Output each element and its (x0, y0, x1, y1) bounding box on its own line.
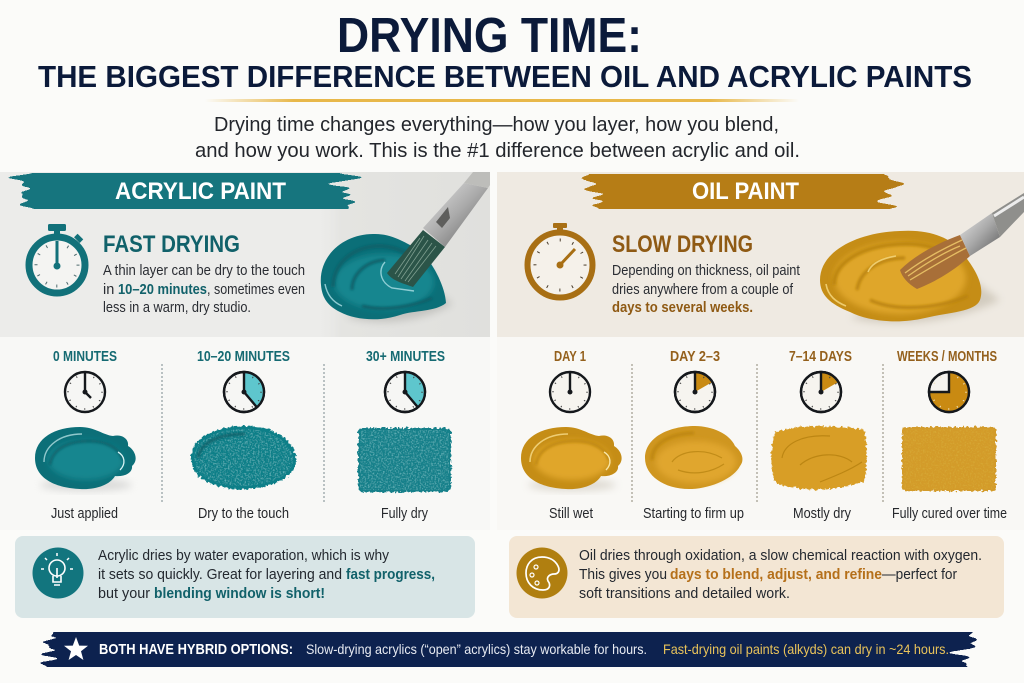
callout text: Oil dries through oxidation, a slow chemical reaction with oxygen. (579, 547, 982, 564)
stage: 0 minutes: Just applied (51, 506, 118, 522)
stage: 0 minutes: 0 MINUTES (53, 349, 117, 365)
intro text: Drying time changes everything—how you layer, how you blend, (214, 113, 779, 136)
intro text: and how you work. This is the #1 difference between acrylic and oil. (195, 139, 800, 162)
banner text (99, 641, 949, 658)
stage: 10-20 minutes: 10–20 MINUTES (197, 349, 290, 365)
stage: day 1: DAY 1 (554, 349, 586, 365)
icon: clock (528, 223, 592, 298)
callout text: fast progress, (346, 566, 435, 583)
callout text: but your (98, 585, 150, 602)
title underline (205, 99, 799, 102)
text block: fast drying: A thin layer can be dry to the touch (103, 263, 305, 279)
stage: day 2-3 (643, 349, 744, 522)
stage: day 1 (521, 349, 622, 522)
stage: day 2-3: Starting to firm up (643, 506, 744, 522)
icon: light bulb (32, 548, 84, 598)
divider (161, 364, 163, 502)
stage: 30+ minutes (358, 349, 451, 522)
timeline: acrylic (35, 349, 451, 522)
stage: weeks / months: WEEKS / MONTHS (897, 349, 997, 365)
stage: day 2-3: DAY 2–3 (670, 349, 720, 365)
stage: 0 minutes (35, 349, 136, 522)
divider (323, 364, 325, 502)
title (38, 9, 972, 94)
divider (882, 364, 884, 502)
stage: 30+ minutes: Fully dry (381, 506, 429, 522)
stage: day 1: Still wet (549, 506, 593, 522)
intro text (195, 113, 800, 162)
title: DRYING TIME: (337, 9, 642, 63)
illustration: yellow paint and brush (820, 193, 1024, 323)
callout text (98, 547, 435, 602)
text block: slow drying: days to several weeks. (612, 300, 753, 316)
text block: fast drying: 10–20 minutes (118, 282, 207, 298)
text block: slow drying: SLOW DRYING (612, 231, 753, 258)
divider (756, 364, 758, 502)
stage: 7-14 days: 7–14 DAYS (789, 349, 852, 365)
text block: fast drying: less in a warm, dry studio. (103, 300, 251, 316)
callout text: it sets so quickly. Great for layering and (98, 566, 342, 583)
stage: 7-14 days: Mostly dry (793, 506, 852, 522)
text block: fast drying: in (103, 282, 118, 298)
callout text: days to blend, adjust, and refine (670, 566, 882, 583)
panel: acrylic (0, 172, 490, 618)
stage: 30+ minutes: 30+ MINUTES (366, 349, 445, 365)
banner text: Slow-drying acrylics (“open” acrylics) stay workable for hours. (306, 641, 647, 657)
banner: hybrid options (47, 632, 968, 667)
text block: fast drying: , sometimes even (207, 282, 305, 298)
divider (631, 364, 633, 502)
text block: slow drying: dries anywhere from a couple of (612, 282, 794, 298)
stage: 10-20 minutes (191, 349, 296, 522)
icon: star (64, 637, 88, 660)
stage: weeks / months (892, 349, 1007, 522)
timeline: oil (521, 349, 1007, 522)
callout text: blending window is short! (154, 585, 325, 602)
callout: oil (509, 536, 1004, 618)
banner text: BOTH HAVE HYBRID OPTIONS: (99, 641, 293, 658)
callout text (579, 547, 982, 602)
heading: acrylic paint: ACRYLIC PAINT (115, 178, 286, 205)
heading: oil paint: OIL PAINT (692, 178, 799, 205)
stage: 10-20 minutes: Dry to the touch (198, 506, 289, 522)
heading: acrylic paint (24, 173, 346, 209)
icon: stopwatch (29, 224, 85, 293)
icon: palette (516, 548, 568, 598)
banner text: Fast-drying oil paints (alkyds) can dry in ~24 hours. (663, 641, 949, 657)
heading: oil paint (596, 174, 882, 209)
callout text: Acrylic dries by water evaporation, which is why (98, 547, 389, 564)
callout: acrylic (15, 536, 475, 618)
text block: slow drying: Depending on thickness, oil paint (612, 263, 800, 279)
illustration: teal paint and brush (321, 172, 490, 322)
text block: fast drying (103, 231, 305, 316)
text block: fast drying: FAST DRYING (103, 231, 240, 258)
title: THE BIGGEST DIFFERENCE BETWEEN OIL AND ACRYLIC PAINTS (38, 60, 972, 94)
panel: oil (497, 172, 1024, 618)
stage: weeks / months: Fully cured over time (892, 506, 1007, 522)
stage: 7-14 days (771, 349, 867, 522)
text block: slow drying (612, 231, 800, 316)
callout text: —perfect for (882, 566, 957, 583)
callout text: This gives you (579, 566, 667, 583)
callout text: soft transitions and detailed work. (579, 585, 790, 602)
